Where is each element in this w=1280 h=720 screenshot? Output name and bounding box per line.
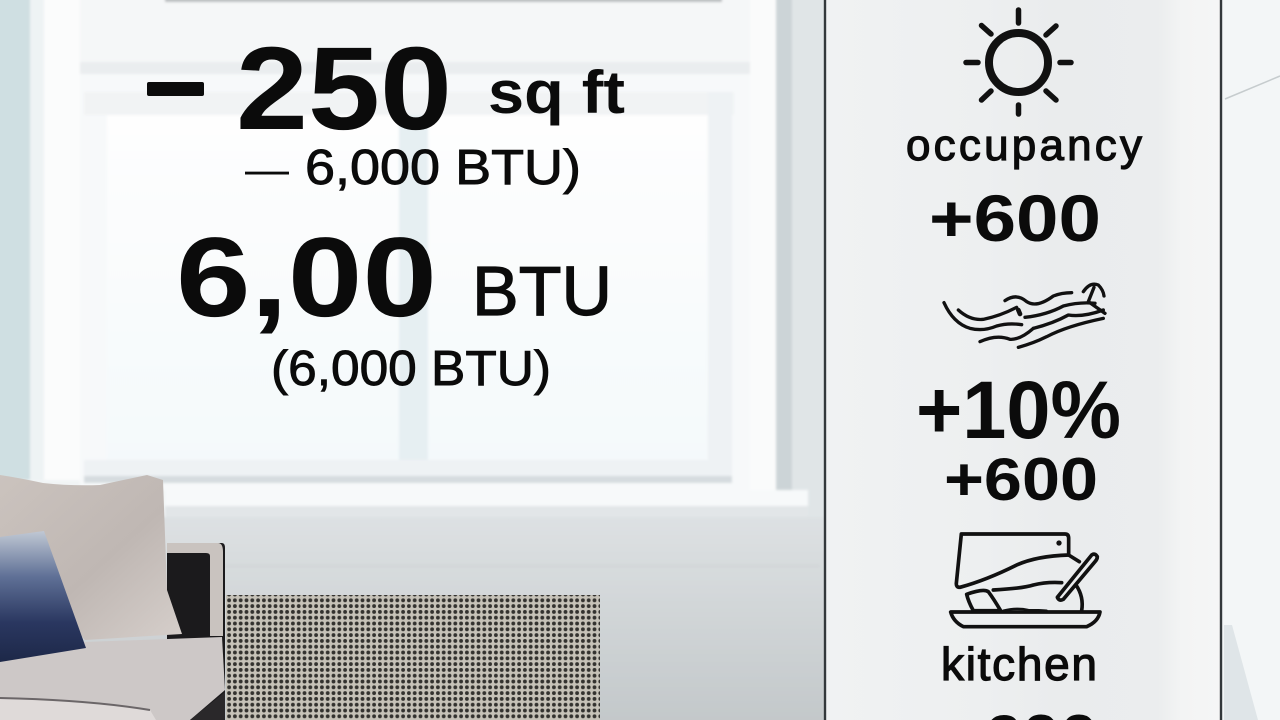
- text: BTU note: (6,000 BTU): [271, 342, 551, 396]
- right wall edge: [1223, 0, 1280, 720]
- icon: air waves: [944, 284, 1105, 347]
- heading: room area: 250: [236, 23, 452, 155]
- label: occupancy: occupancy: [906, 121, 1142, 170]
- sofa with cushions: [0, 475, 225, 720]
- heading: room area: [147, 23, 625, 155]
- heading: BTU total: BTU: [472, 252, 612, 330]
- label: kitchen: kitchen: [941, 638, 1097, 690]
- radiator cover: [226, 595, 600, 720]
- text: base capacity range: —: [245, 145, 289, 194]
- value: +600: +600: [944, 446, 1098, 513]
- panel: adjustments sidebar: [825, 0, 1221, 720]
- text: base capacity range: 6,000 BTU): [305, 141, 581, 195]
- icon: kitchen food on plate: [951, 534, 1100, 627]
- icon: sun: [966, 10, 1071, 114]
- heading: BTU total: [176, 214, 612, 340]
- heading: BTU total: 6,00: [176, 214, 437, 340]
- heading: room area: sq ft: [488, 59, 625, 126]
- value: +10%: +10%: [916, 365, 1121, 456]
- value: occupancy +600: +600: [929, 181, 1101, 255]
